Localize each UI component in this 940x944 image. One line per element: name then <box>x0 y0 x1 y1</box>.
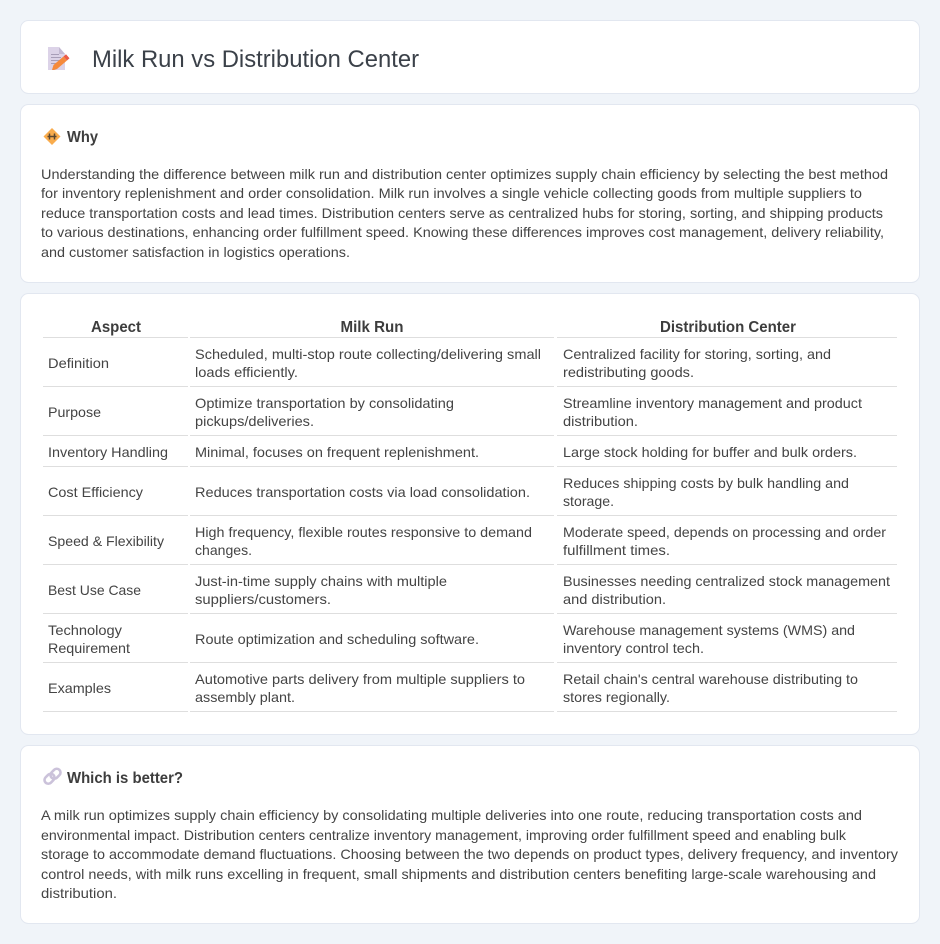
row: technology requirement: Requirement <box>48 640 130 656</box>
text block: why paragraph: reduce transportation costs and lead times. Distribution centers serve as centralized hubs for storing, sorting, and shipping products <box>41 205 883 221</box>
row: speed and flexibility: Speed & Flexibility <box>48 533 164 549</box>
row: speed and flexibility <box>48 524 886 558</box>
row: best use case: Businesses needing centralized stock management <box>563 573 890 589</box>
text block: which is better paragraph: distribution. <box>41 885 117 901</box>
row: definition: loads efficiently. <box>195 364 298 380</box>
row: cost efficiency: Reduces transportation costs via load consolidation. <box>195 484 530 500</box>
row: definition: Definition <box>48 355 109 371</box>
row: technology requirement: Route optimization and scheduling software. <box>195 631 479 647</box>
row: purpose: Optimize transportation by consolidating <box>195 395 454 411</box>
row: speed and flexibility: fulfillment times. <box>563 542 670 558</box>
row: technology requirement: Technology <box>48 622 122 638</box>
text block: why paragraph: to various destinations, enhancing order fulfillment speed. Knowing these differences improves cost management, delivery reliability, <box>41 224 884 240</box>
row: purpose: Purpose <box>48 404 101 420</box>
row: purpose: pickups/deliveries. <box>195 413 314 429</box>
row: inventory handling: Inventory Handling <box>48 444 168 460</box>
panel: why <box>20 104 920 282</box>
row: definition: redistributing goods. <box>563 364 694 380</box>
panel: which is better <box>20 746 920 924</box>
row: best use case: Just-in-time supply chains with multiple <box>195 573 447 589</box>
row: technology requirement: Warehouse management systems (WMS) and <box>563 622 855 638</box>
row: inventory handling: Large stock holding for buffer and bulk orders. <box>563 444 857 460</box>
icon: link <box>43 767 62 785</box>
row: inventory handling: Minimal, focuses on frequent replenishment. <box>195 444 479 460</box>
row: speed and flexibility: changes. <box>195 542 252 558</box>
text block: which is better paragraph <box>41 807 898 901</box>
table header <box>91 319 796 336</box>
heading: which is better: Which is better? <box>67 770 183 787</box>
row: technology requirement: inventory control tech. <box>563 640 704 656</box>
text block: why paragraph: and customer satisfaction in logistics operations. <box>41 244 350 260</box>
row: definition: Scheduled, multi-stop route collecting/delivering small <box>195 346 541 362</box>
icon: memo with pencil <box>48 47 70 70</box>
row: cost efficiency <box>48 475 849 509</box>
table header: Distribution Center <box>660 319 796 336</box>
row: examples: Automotive parts delivery from multiple suppliers to <box>195 671 525 687</box>
row: examples <box>48 671 858 705</box>
text block: why paragraph: for inventory replenishment and order consolidation. Milk run involves a single vehicle collecting goods from multiple suppliers to <box>41 185 862 201</box>
text block: which is better paragraph: A milk run optimizes supply chain efficiency by consolidating multiple deliveries into one route, reducing transportation costs and <box>41 807 862 823</box>
text block: which is better paragraph: storage to accommodate demand fluctuations. Choosing between the two depends on product types, delivery frequency, and inventory <box>41 846 898 862</box>
row: purpose: Streamline inventory management and product <box>563 395 862 411</box>
row: best use case: and distribution. <box>563 591 666 607</box>
row: inventory handling <box>48 444 857 460</box>
row: speed and flexibility: Moderate speed, depends on processing and order <box>563 524 886 540</box>
panel: comparison table <box>20 294 920 734</box>
icon: warning diamond <box>44 128 60 145</box>
table header: Milk Run <box>340 319 404 336</box>
text block: which is better paragraph: control needs, with milk runs excelling in frequent, small shipments and distribution centers benefiting large-scale warehousing and <box>41 866 876 882</box>
row: best use case: Best Use Case <box>48 582 141 598</box>
row: examples: Retail chain's central warehouse distributing to <box>563 671 858 687</box>
row: best use case <box>48 573 890 607</box>
title: Milk Run vs Distribution Center <box>92 46 419 73</box>
row: definition: Centralized facility for storing, sorting, and <box>563 346 831 362</box>
row: definition <box>48 346 831 380</box>
panel: title header <box>20 20 920 94</box>
row: examples: assembly plant. <box>195 689 295 705</box>
row: cost efficiency: Reduces shipping costs by bulk handling and <box>563 475 849 491</box>
row: purpose: distribution. <box>563 413 638 429</box>
row: speed and flexibility: High frequency, flexible routes responsive to demand <box>195 524 532 540</box>
row: cost efficiency: storage. <box>563 493 614 509</box>
text block: which is better paragraph: environmental impact. Distribution centers centralize inventory management, improving order fulfillment speed and enabling bulk <box>41 827 847 843</box>
table header: Aspect <box>91 319 142 336</box>
row: technology requirement <box>48 622 855 656</box>
heading: why: Why <box>67 129 98 146</box>
text block: why paragraph <box>41 166 888 260</box>
text block: why paragraph: Understanding the difference between milk run and distribution center optimizes supply chain efficiency by selecting the best method <box>41 166 888 182</box>
row: best use case: suppliers/customers. <box>195 591 331 607</box>
row: examples: stores regionally. <box>563 689 670 705</box>
row: examples: Examples <box>48 680 111 696</box>
row: purpose <box>48 395 862 429</box>
row: cost efficiency: Cost Efficiency <box>48 484 143 500</box>
